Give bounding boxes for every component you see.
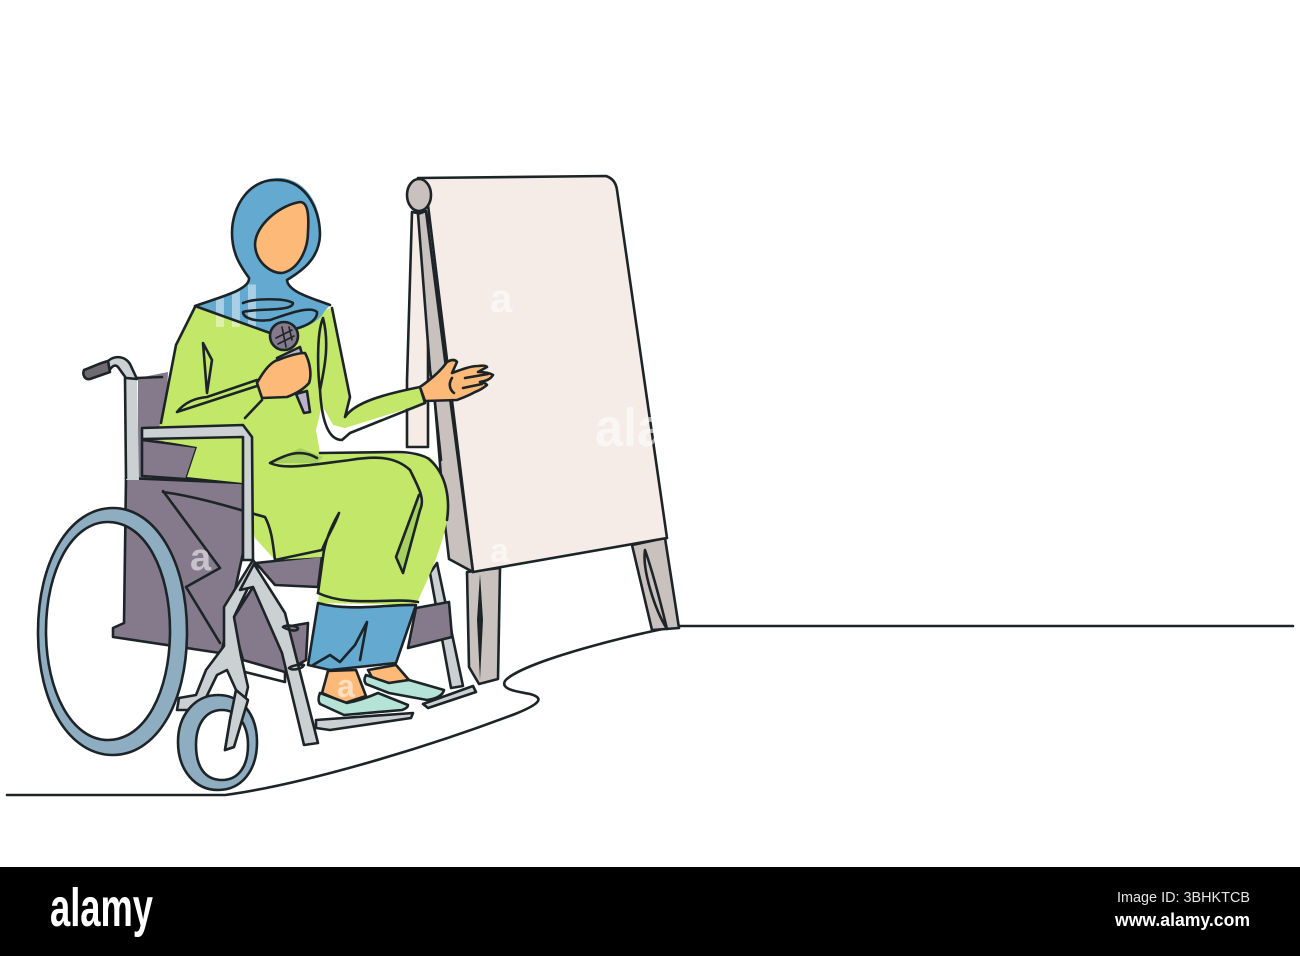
footrest pad (408, 602, 452, 648)
hijab (195, 178, 330, 333)
wheelchair front frame (142, 425, 413, 790)
frame clips (283, 626, 304, 669)
mic handle (296, 391, 310, 413)
handle grip (83, 361, 110, 379)
fork front over wheel (225, 690, 248, 750)
watermarks: a (490, 532, 510, 570)
front fork (177, 560, 258, 750)
flipchart left leg (467, 568, 500, 684)
pants (308, 603, 416, 670)
armrest tube (142, 425, 253, 560)
push handle (108, 357, 137, 379)
support strut (245, 672, 285, 682)
panel fold line (163, 491, 220, 643)
flipchart back panel (407, 212, 428, 447)
cushion back (142, 440, 243, 483)
hijab watermark: ill (212, 275, 260, 340)
backrest (138, 372, 168, 480)
holding hand (257, 353, 310, 398)
image id: Image ID: 3BHKTCB (1117, 889, 1250, 906)
hijab outline (195, 180, 330, 333)
right frame tube (430, 563, 463, 688)
alamy logo: alamy (50, 878, 153, 938)
watermarks: ala (595, 398, 666, 458)
wheelchair back parts (38, 357, 308, 755)
feet (322, 670, 366, 703)
flipchart paper (418, 176, 667, 572)
watermarks: a (190, 537, 212, 579)
figure (157, 178, 493, 715)
pointing hand (420, 360, 493, 401)
right shoe (364, 675, 444, 700)
side panel (113, 478, 243, 653)
footer bar (0, 867, 1300, 956)
watermarks (190, 277, 666, 704)
right footplate (423, 686, 476, 708)
mic neck (277, 347, 305, 372)
backrest tube (125, 378, 139, 480)
flipchart stand strip (418, 211, 473, 572)
flipchart right leg (632, 538, 679, 630)
dress (157, 307, 448, 605)
mic head (270, 322, 298, 350)
long leg (240, 564, 318, 745)
flipchart (407, 176, 679, 684)
face (255, 202, 308, 273)
ground line (7, 626, 1293, 795)
watermarks: a (490, 277, 513, 321)
website: www.alamy.com (1114, 910, 1250, 930)
dress fold shade (270, 448, 323, 463)
front footplate (316, 713, 413, 730)
flipchart roll (407, 179, 431, 211)
seat cushion (256, 556, 322, 587)
left shoe (318, 693, 408, 715)
small wheel (178, 695, 257, 790)
watermarks: a (337, 668, 355, 704)
big wheel (38, 508, 187, 755)
microphone (270, 322, 310, 413)
dress outline (161, 307, 195, 423)
lower triangle panel (232, 587, 308, 672)
